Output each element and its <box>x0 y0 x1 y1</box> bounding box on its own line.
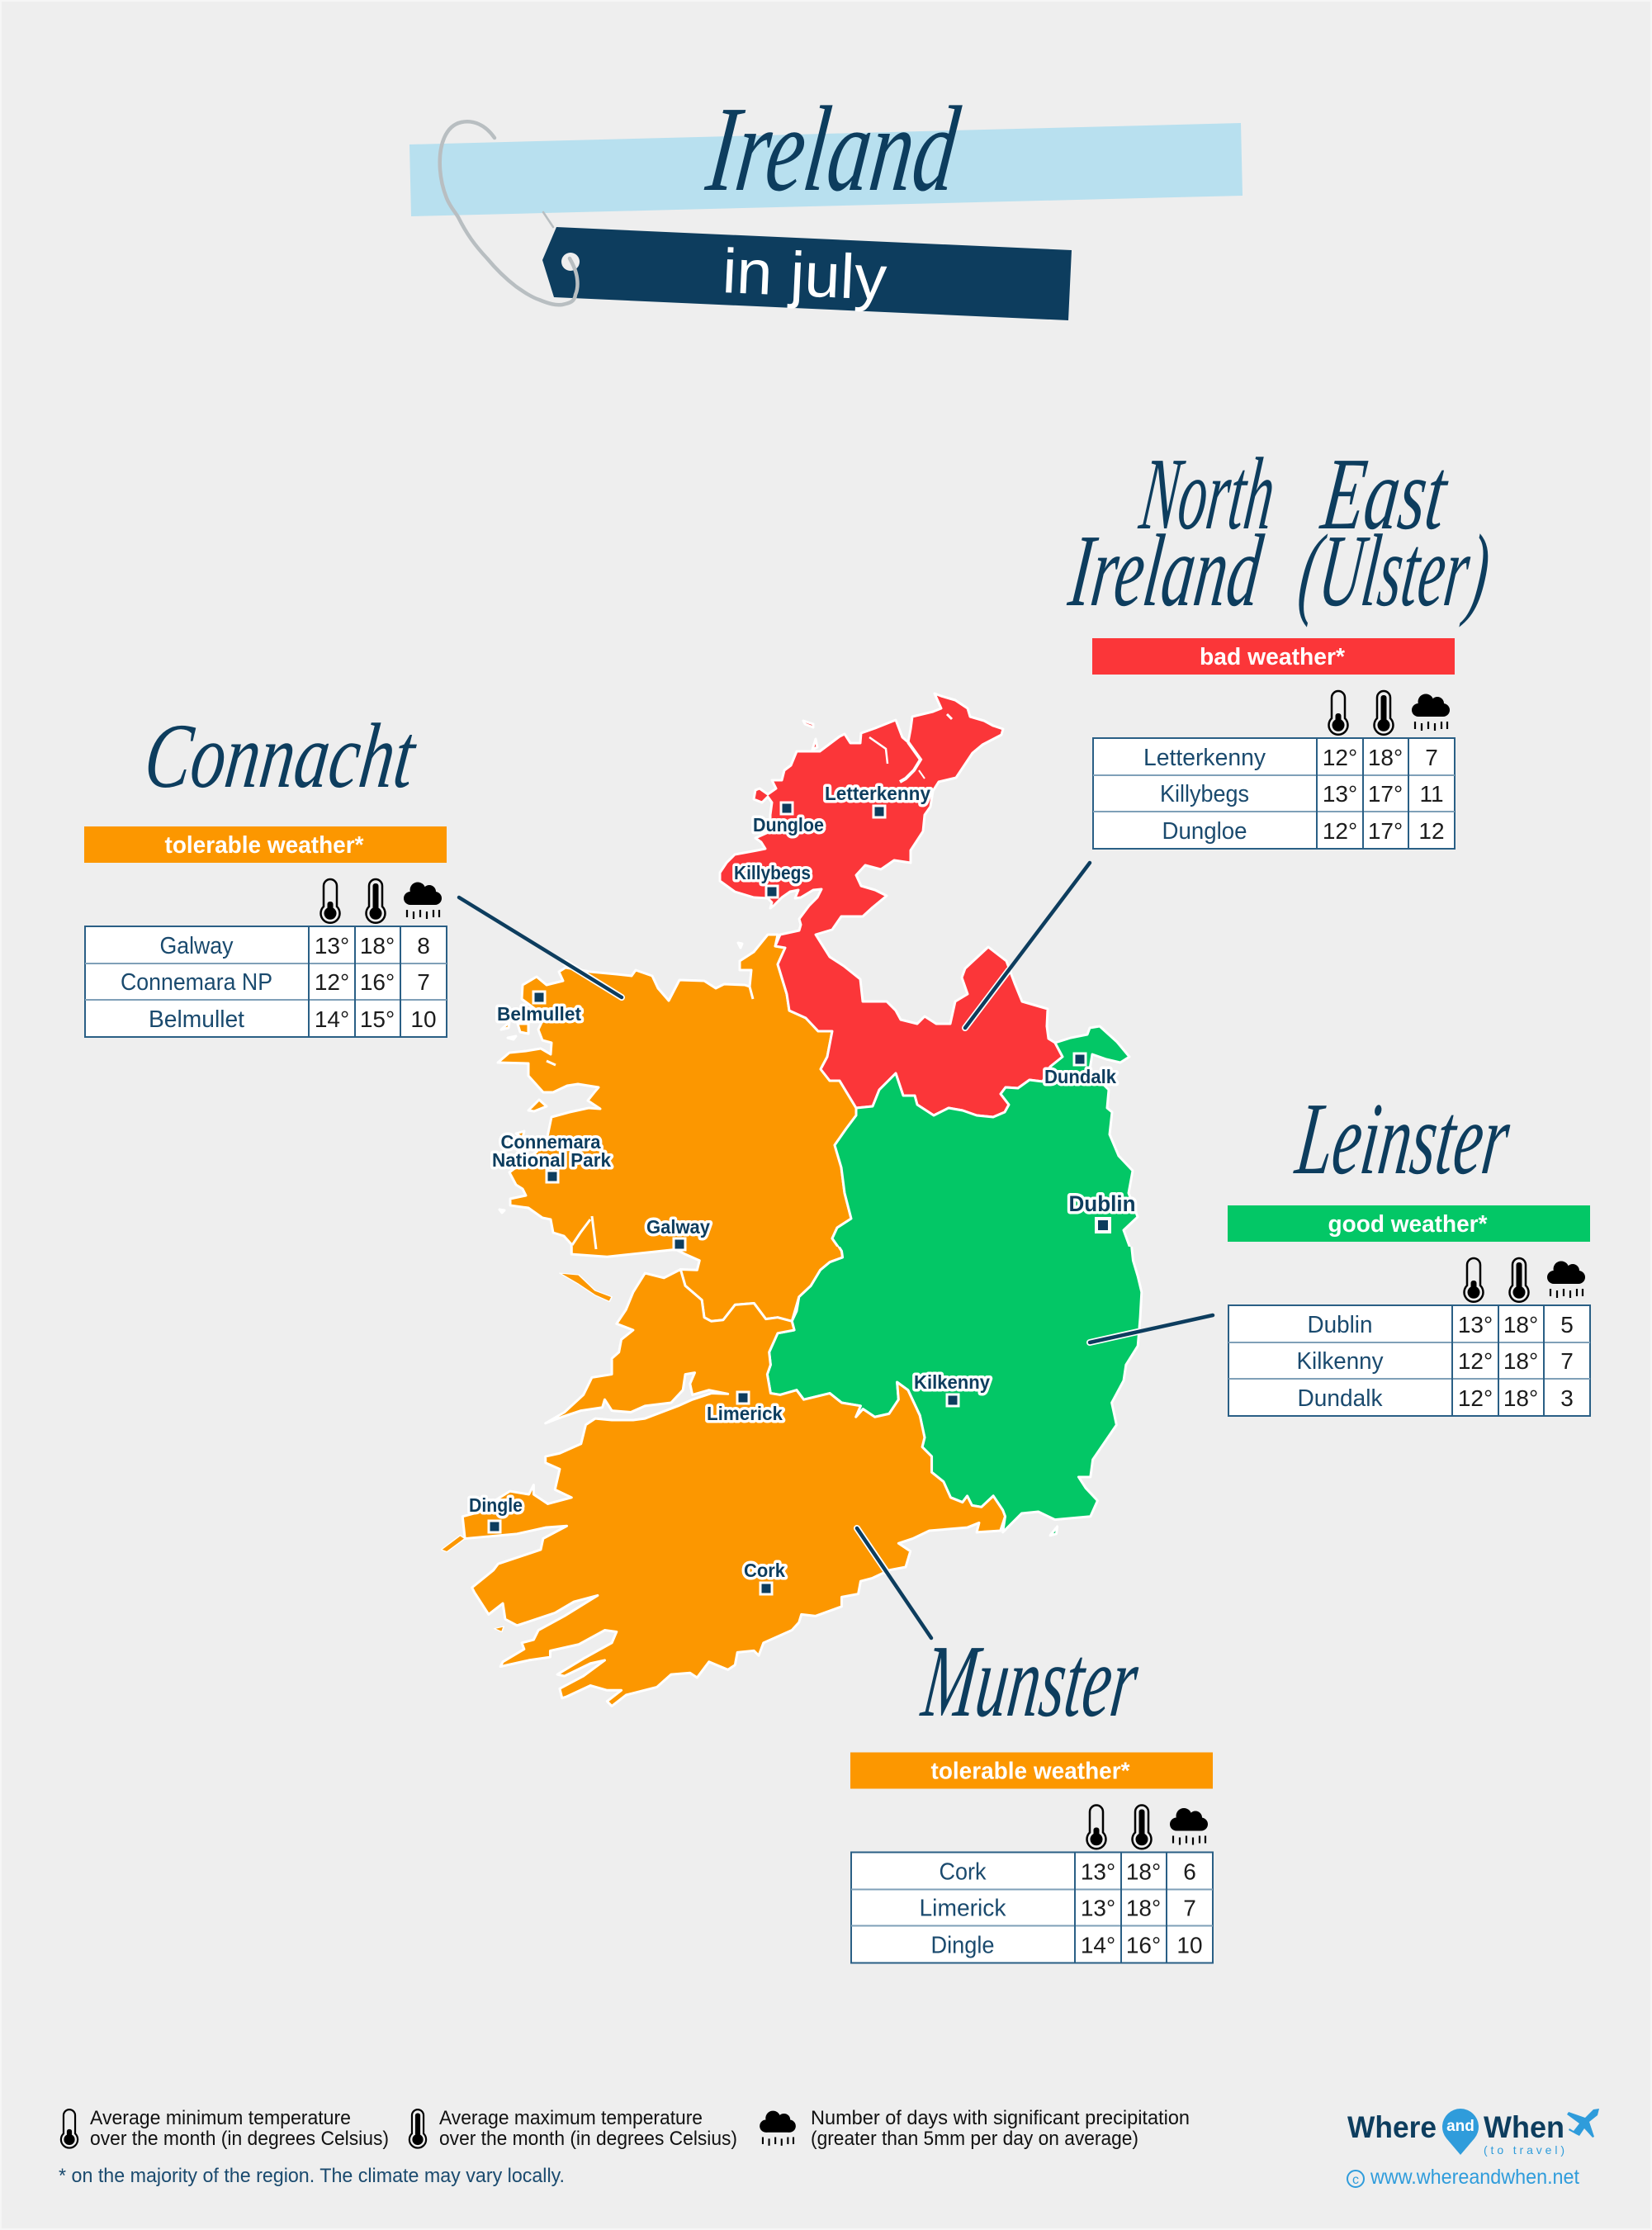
town: Connemara National Park: Connemara <box>500 1131 601 1153</box>
table: 7 <box>1425 745 1438 770</box>
town: Dungloe: Dungloe <box>753 814 824 836</box>
town: Killybegs: Killybegs <box>734 862 811 883</box>
map of Ireland <box>441 694 1142 1706</box>
table: 13° <box>1458 1312 1493 1338</box>
legend text: precipitation: (greater than 5mm per day on average) <box>811 2128 1138 2150</box>
town: Letterkenny: Letterkenny <box>825 783 930 804</box>
panel: Leinster climate table <box>1228 1205 1590 1416</box>
weather bar: bad weather* <box>1200 644 1346 670</box>
heading: Connacht: Connacht <box>140 705 422 807</box>
town: Connemara National Park: National Park <box>492 1149 611 1171</box>
table icons <box>1465 1258 1585 1302</box>
table: 12° <box>1458 1348 1493 1374</box>
panel: Connacht climate table <box>84 826 447 1037</box>
town: Galway: Galway <box>646 1216 710 1238</box>
legend text: minimum temperature: Average minimum temperature <box>90 2107 351 2129</box>
region: Ulster (bad weather) <box>720 694 1063 1117</box>
table: 18° <box>1126 1896 1161 1920</box>
logo tagline: (to travel) <box>1484 2143 1564 2157</box>
table: 17° <box>1368 781 1403 807</box>
title text: Ireland <box>700 82 966 217</box>
town: Dundalk: Dundalk <box>1044 1066 1116 1087</box>
town: Dingle: Dingle <box>469 1494 523 1516</box>
leader line: Connacht <box>459 897 622 997</box>
table: Letterkenny <box>1143 745 1266 771</box>
heading: North East Ireland (Ulster) <box>1063 437 1496 628</box>
table: 18° <box>1503 1385 1538 1411</box>
region: Connacht (tolerable weather) <box>498 935 856 1321</box>
weather bar: tolerable weather* <box>931 1759 1130 1785</box>
town: Galway <box>646 1216 710 1252</box>
town: Kilkenny: Kilkenny <box>914 1371 990 1393</box>
icon: precipitation <box>760 2111 796 2146</box>
table: Dublin <box>1308 1312 1372 1338</box>
logo wordmark <box>1347 2110 1564 2144</box>
leader line: Ulster <box>965 863 1090 1028</box>
table icons <box>320 879 442 923</box>
legend text: minimum temperature <box>90 2107 389 2150</box>
table: Dundalk <box>1298 1385 1383 1412</box>
table icons <box>1086 1805 1208 1849</box>
town: Cork <box>744 1560 785 1595</box>
logo plane <box>1567 2109 1599 2138</box>
weather bar <box>850 1752 1213 1788</box>
table: 18° <box>1503 1348 1538 1374</box>
town: Cork: Cork <box>744 1560 785 1581</box>
saltee islands <box>1050 1527 1058 1536</box>
town: Limerick: Limerick <box>707 1403 783 1424</box>
table <box>1093 738 1455 849</box>
town: Dublin <box>1068 1191 1136 1233</box>
table <box>85 926 447 1037</box>
table: Killybegs <box>1160 781 1249 807</box>
panel: Munster climate table <box>850 1752 1213 1963</box>
table: 15° <box>360 1006 395 1032</box>
table: 18° <box>360 933 395 959</box>
table: 17° <box>1368 818 1403 844</box>
leader line: Munster <box>857 1528 931 1638</box>
table <box>851 1853 1213 1963</box>
table: 18° <box>1368 745 1403 770</box>
town: Dublin: Dublin <box>1068 1191 1136 1216</box>
donegal islands <box>803 721 817 750</box>
table: 16° <box>1126 1932 1161 1958</box>
weather bar <box>1228 1205 1590 1242</box>
table: Kilkenny <box>1296 1348 1384 1375</box>
legend text: minimum temperature: over the month (in degrees Celsius) <box>90 2128 389 2150</box>
legend text: maximum temperature: over the month (in degrees Celsius) <box>439 2128 737 2150</box>
tag ring <box>440 121 578 305</box>
subtitle tag <box>542 227 1072 320</box>
footnote: * on the majority of the region. The climate may vary locally. <box>59 2165 565 2187</box>
heading: North East Ireland (Ulster): Ireland <box>1063 514 1268 628</box>
region: Leinster (good weather) <box>767 1026 1142 1536</box>
heading: Leinster: Leinster <box>1290 1082 1516 1196</box>
table <box>1228 1305 1590 1416</box>
table: Galway <box>160 933 234 959</box>
logo wordmark: When <box>1484 2110 1564 2144</box>
town: Limerick <box>707 1390 783 1424</box>
table: 10 <box>1176 1932 1203 1958</box>
table: Dingle <box>931 1932 994 1958</box>
logo url: c <box>1352 2173 1359 2187</box>
table: 14° <box>1081 1932 1115 1958</box>
logo pin: and <box>1446 2118 1474 2135</box>
weather bar <box>1092 638 1455 675</box>
table: 12 <box>1418 818 1445 844</box>
subtitle text: in july <box>721 236 888 314</box>
title: Ireland in july tag <box>409 82 1243 320</box>
table: Connemara NP <box>121 969 272 996</box>
weather bar: good weather* <box>1328 1211 1488 1238</box>
tag hole <box>561 253 580 271</box>
weather bar <box>84 826 447 863</box>
weather bar: tolerable weather* <box>165 832 364 859</box>
table: 18° <box>1126 1859 1161 1884</box>
table: 13° <box>315 933 349 959</box>
legend text: maximum temperature: Average maximum temperature <box>439 2107 703 2129</box>
icon: maximum temperature <box>409 2109 426 2148</box>
town: Belmullet: Belmullet <box>497 1003 581 1025</box>
table: 13° <box>1323 781 1357 807</box>
table: 12° <box>1323 818 1357 844</box>
town: Connemara National Park <box>492 1131 611 1184</box>
table: 14° <box>315 1006 349 1032</box>
table: 5 <box>1560 1312 1574 1338</box>
legend text: precipitation <box>811 2107 1190 2150</box>
legend text: maximum temperature <box>439 2107 737 2150</box>
town: Belmullet <box>497 991 581 1025</box>
heading: North East Ireland (Ulster): (Ulster) <box>1294 514 1496 628</box>
connacht islands <box>499 943 742 1213</box>
logo: Where and When <box>1347 2109 1599 2189</box>
title banner <box>409 123 1243 216</box>
table: 11 <box>1419 781 1444 807</box>
table: 8 <box>417 933 430 959</box>
heading: North East Ireland (Ulster): North <box>1134 437 1281 552</box>
heading: North East Ireland (Ulster): East <box>1315 437 1455 552</box>
table: 18° <box>1503 1312 1538 1338</box>
table: 16° <box>360 969 395 995</box>
town: Kilkenny <box>914 1371 990 1407</box>
logo wordmark: Where <box>1347 2110 1437 2144</box>
table: 10 <box>410 1006 437 1032</box>
table: 12° <box>1323 745 1357 770</box>
table: 7 <box>417 969 430 995</box>
panel: Ulster climate table <box>1092 638 1455 849</box>
table: 3 <box>1560 1385 1574 1411</box>
table: 13° <box>1081 1859 1115 1884</box>
table: 7 <box>1183 1896 1196 1920</box>
munster islands <box>441 1273 612 1631</box>
table: Cork <box>940 1859 987 1886</box>
town: Dingle <box>469 1494 523 1534</box>
heading: Munster: Munster <box>916 1624 1144 1739</box>
town: Dungloe <box>753 801 824 836</box>
table: 13° <box>1081 1896 1115 1920</box>
table: 6 <box>1183 1859 1196 1884</box>
logo url: www.whereandwhen.net <box>1370 2166 1579 2189</box>
town: Dundalk <box>1044 1052 1116 1087</box>
region: Munster (tolerable weather) <box>441 1270 1006 1706</box>
connacht coastal inlets <box>547 987 753 1249</box>
icon: minimum temperature <box>61 2109 78 2148</box>
table: 12° <box>315 969 349 995</box>
logo pin <box>1442 2109 1479 2155</box>
leader line: Leinster <box>1090 1315 1213 1342</box>
table: Limerick <box>920 1896 1006 1922</box>
table: 7 <box>1560 1348 1574 1374</box>
town: Killybegs <box>734 862 811 898</box>
table: Belmullet <box>149 1006 244 1033</box>
table: Dungloe <box>1162 818 1247 845</box>
legend <box>61 2107 1190 2150</box>
legend text: precipitation: Number of days with significant precipitation <box>811 2107 1190 2129</box>
table: 12° <box>1458 1385 1493 1411</box>
town: Letterkenny <box>825 783 930 819</box>
donegal loughs <box>869 714 952 782</box>
table icons <box>1329 691 1450 735</box>
